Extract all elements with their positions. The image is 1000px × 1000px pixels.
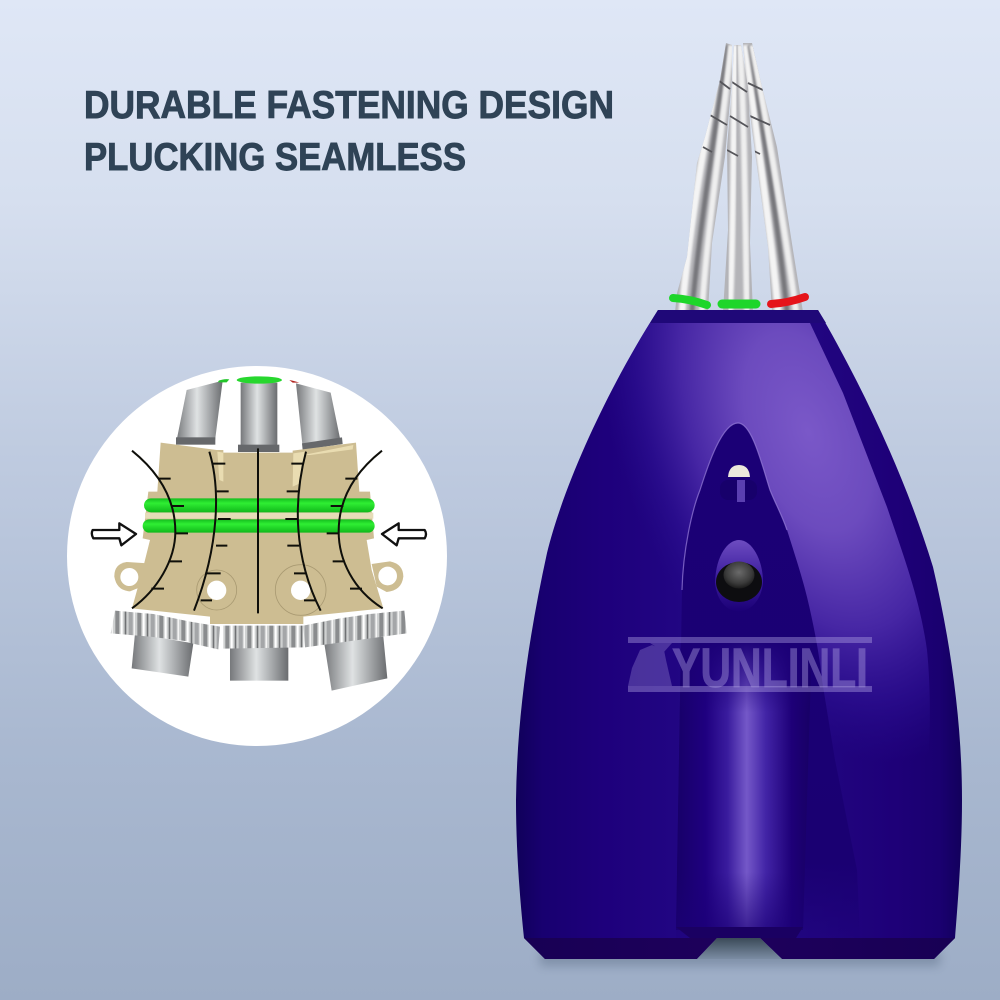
green o-rings [143, 498, 375, 533]
top collar [650, 310, 826, 323]
base chamfer [524, 938, 955, 959]
product: floor shadow [540, 950, 940, 966]
watermark bars [628, 637, 872, 692]
needle: left [675, 43, 732, 310]
LED lamp [728, 465, 750, 477]
watermark name: YUNLINLI [672, 636, 868, 699]
dark wedge and arched front panel [676, 423, 860, 938]
ear lugs [114, 561, 403, 592]
central ridge [676, 640, 812, 930]
product: needle tweezers [670, 40, 810, 315]
body shell [516, 310, 962, 959]
needle: centre [723, 45, 753, 310]
white circle [67, 366, 447, 746]
indicator stem [737, 480, 745, 502]
watermark face icon [628, 643, 672, 686]
top rings [218, 376, 299, 384]
watermark: YUNLINLI logo [628, 636, 872, 699]
title [84, 84, 614, 179]
needle: right [743, 43, 803, 310]
clamp light highlights [217, 445, 353, 487]
black stress curves and ticks [132, 448, 383, 613]
ridge vertical fade [676, 640, 812, 930]
beige clamp body [132, 443, 383, 624]
button recess [715, 540, 763, 611]
notch shadow [697, 938, 782, 959]
top metal cylinders [176, 381, 343, 452]
indicator slot [720, 480, 757, 500]
title: DURABLE FASTENING DESIGN [84, 84, 614, 127]
green ring: centre [722, 300, 756, 308]
arrow: pressing from right [382, 523, 426, 545]
front panel foot [676, 927, 803, 938]
bottom metal cylinders [132, 633, 387, 691]
product: purple body [516, 310, 962, 959]
arrow: pressing from left [92, 523, 136, 545]
front panel light edge [682, 423, 787, 590]
button [716, 562, 762, 602]
title: PLUCKING SEAMLESS [84, 136, 466, 179]
gears [111, 611, 407, 649]
gap between the two bands [145, 513, 373, 519]
green ring: left [673, 298, 707, 305]
panel: circular detail of fastening mechanism [67, 366, 447, 746]
lit front face [611, 323, 930, 728]
red ring [771, 297, 805, 304]
holes [120, 565, 397, 615]
